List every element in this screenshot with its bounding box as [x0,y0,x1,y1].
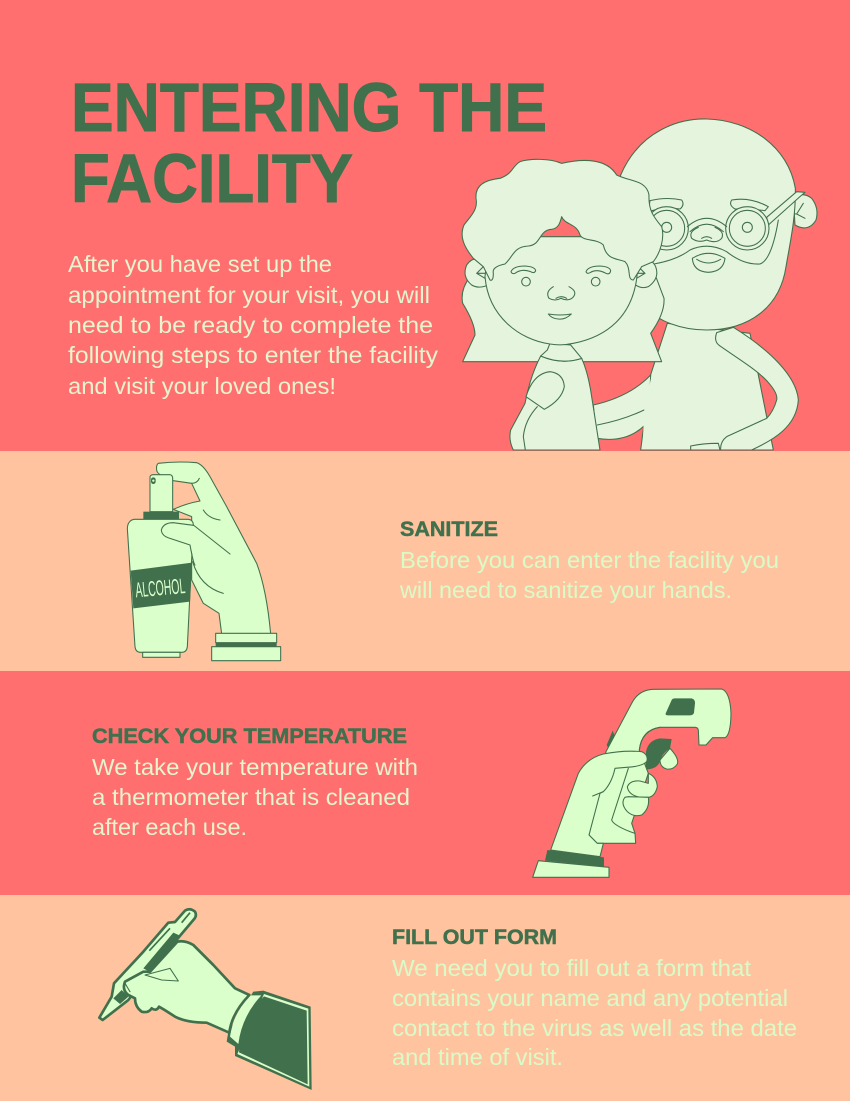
text: sanitize [399,547,779,603]
text: form [392,955,797,1070]
icon: hand writing with pen [99,909,312,1090]
icon: hand with alcohol spray: ALCOHOL [134,574,186,602]
background band: temperature [0,671,850,895]
man body [641,323,773,450]
hand [124,941,249,1033]
sleeve [227,991,312,1090]
girl left arm [526,372,564,409]
cover of arm overlap on body [643,377,663,448]
girl back hair [462,270,664,362]
text: form: and time of visit. [392,1044,563,1070]
title: FACILITY [71,140,353,217]
icon: hand with thermometer [533,689,731,877]
man head [617,119,795,330]
girl face [485,237,637,345]
hand [157,462,271,634]
bottle nozzle [150,475,173,512]
text: form: We need you to fill out a form that [392,955,752,981]
cuff [545,850,604,867]
text: form: contact to the virus as well as the date [392,1015,797,1041]
man right arm [716,327,798,450]
girl ears [465,258,492,287]
man arm behind child [593,375,651,439]
title [71,69,547,217]
thermometer screen [666,698,695,715]
intro text: and visit your loved ones! [68,373,336,399]
title: ENTERING THE [71,69,547,146]
background band: sanitize [0,451,850,671]
trigger [660,748,678,769]
text: form: contains your name and any potential [392,985,788,1011]
girl body [510,356,600,450]
cuff [216,633,277,643]
bottle label [131,563,192,608]
icon: hand with alcohol spray [127,462,281,661]
text: temperature: after each use. [92,814,247,840]
intro text: following steps to enter the facility [68,342,439,368]
intro text: need to be ready to complete the [68,312,433,338]
girl face details [511,266,611,319]
pen shaft [143,933,181,972]
hand [551,751,647,857]
girl neck [541,343,582,361]
bottle collar [143,512,179,520]
fingers [627,773,657,797]
intro text [68,251,439,399]
illustration: grandfather and child [462,119,817,450]
bottle body [127,519,193,652]
heading: temperature: CHECK YOUR TEMPERATURE [92,725,407,748]
heading: sanitize: SANITIZE [400,518,498,541]
text: sanitize: Before you can enter the facility you [400,547,779,573]
intro text: After you have set up the [68,251,332,277]
text: temperature: a thermometer that is cleaned [92,784,410,810]
pen [99,909,196,1020]
text: sanitize: will need to sanitize your hands. [399,577,732,603]
background band: form [0,895,850,1101]
fingers [161,523,197,573]
girl hair [462,159,663,280]
man glasses and face [645,192,805,272]
sleeve cuff [230,995,261,1044]
text: temperature [92,754,418,840]
text: temperature: We take your temperature with [92,754,418,780]
thermometer body [589,689,731,843]
heading: form: FILL OUT FORM [392,926,557,949]
background band: intro [0,0,850,451]
man ear [793,195,817,228]
intro text: appointment for your visit, you will [68,282,430,308]
